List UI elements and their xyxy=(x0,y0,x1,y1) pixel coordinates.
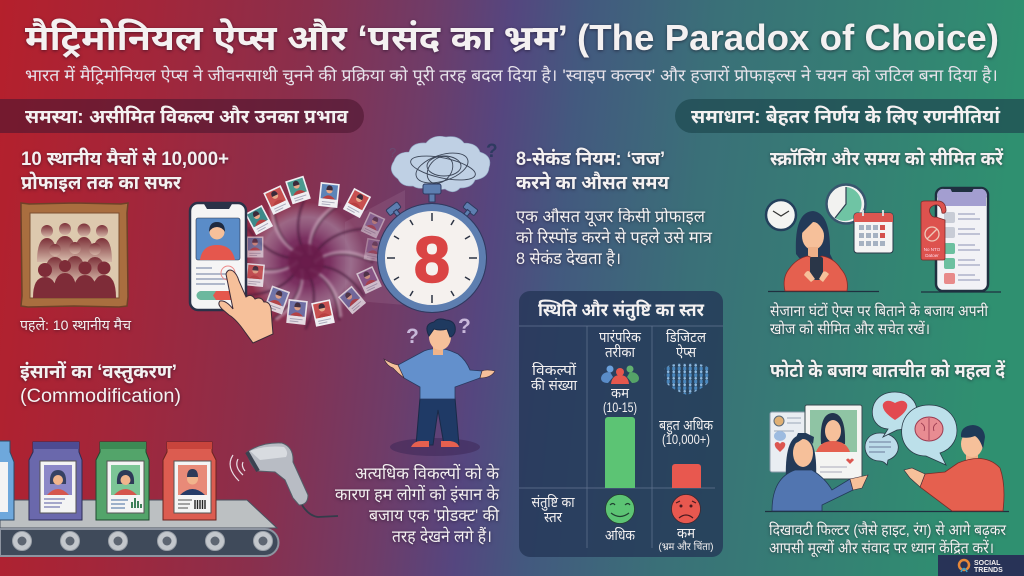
logo: social trends: TRENDS xyxy=(974,567,1003,574)
column: traditional: तरीका xyxy=(605,344,635,360)
text: too many options: कारण हम लोगों को इंसान के xyxy=(335,483,500,504)
title: मैट्रिमोनियल ऐप्स और ‘पसंद का भ्रम’ xyxy=(25,17,568,59)
text: too many options: तरह देखने लगे हैं। xyxy=(392,525,492,546)
logo: social trends xyxy=(938,555,1024,576)
icon: confused person shrugging: ? xyxy=(458,315,471,338)
illustration: woman with clocks and calendar xyxy=(766,184,1001,292)
label: low, confusion and anxiety: कम xyxy=(677,525,696,541)
label: more: अधिक xyxy=(605,527,635,543)
bag: purple xyxy=(29,442,82,520)
icon: chat bubble xyxy=(865,433,898,465)
icon: confused person shrugging: ? xyxy=(406,325,419,348)
row label: satisfaction: संतुष्टि का xyxy=(532,494,575,512)
icon: confused person shrugging xyxy=(384,315,495,456)
bag: blue xyxy=(0,441,14,520)
text: too many options: अत्यधिक विकल्पों को के xyxy=(355,462,500,483)
text: too many options: बजाय एक 'प्रोडक्ट' की xyxy=(369,505,500,525)
table title: स्थिति और संतुष्टि का स्तर xyxy=(538,300,705,321)
heading: commodification xyxy=(20,360,181,407)
icon: sad face xyxy=(672,494,700,524)
row label: satisfaction: स्तर xyxy=(544,509,562,525)
icon: large clock xyxy=(826,184,866,224)
column: traditional xyxy=(599,329,641,360)
heading: 10 matches to 10000 xyxy=(21,147,229,194)
logo: social trends: SOCIAL xyxy=(974,560,1001,567)
title xyxy=(25,17,999,59)
icon: confused thought cloud: ? xyxy=(486,141,498,162)
text: 8-second description xyxy=(516,208,713,268)
text: focus on shared values: आपसी मूल्यों और संवाद पर ध्यान केंद्रित करें। xyxy=(769,539,994,558)
icon: confused thought cloud xyxy=(389,136,498,192)
icon: barcode scanner xyxy=(230,443,338,517)
row label: number of options xyxy=(531,362,577,393)
swirl xyxy=(239,195,373,329)
icon: phone with profile xyxy=(190,203,246,310)
bag: red xyxy=(163,442,216,520)
heading: 10 matches to 10000: प्रोफाइल तक का सफर xyxy=(21,172,182,194)
column: traditional: पारंपरिक xyxy=(599,329,641,345)
bag: green xyxy=(96,442,149,520)
label: low, confusion and anxiety xyxy=(658,525,714,553)
text: 8-second description: 8 सेकंड देखता है। xyxy=(516,249,621,268)
text: limit your search xyxy=(770,302,989,338)
figure: woman on phone xyxy=(784,211,847,291)
icon: stopwatch showing 8 xyxy=(378,184,486,312)
label: few 10-15: (10-15) xyxy=(603,399,637,415)
figure: woman with open palm xyxy=(772,433,868,511)
icon: happy face xyxy=(606,494,634,524)
heading: 8-second rule: 8-सेकंड नियम: ‘जज’ xyxy=(516,147,665,170)
text: focus on shared values xyxy=(769,521,1007,558)
title: (The Paradox of Choice) xyxy=(577,17,999,58)
text: too many options xyxy=(335,462,500,546)
illustration: product conveyor belt xyxy=(0,441,338,556)
label: few 10-15 xyxy=(603,385,637,415)
icon: calendar xyxy=(854,210,893,253)
column: digital apps: डिजिटल xyxy=(666,329,706,345)
icon: large crowd xyxy=(664,364,710,395)
row label: satisfaction xyxy=(532,494,575,525)
icon: brain bubble xyxy=(902,405,957,465)
icon: do not disturb door hanger xyxy=(921,201,946,260)
heading: 8-second rule xyxy=(516,147,670,194)
heading: commodification: इंसानों का ‘वस्तुकरण’ xyxy=(20,360,177,384)
panel: problem banner xyxy=(0,99,364,133)
icon: stopwatch showing 8: 8 xyxy=(414,223,450,296)
figure: man with open palm xyxy=(904,425,1004,511)
panel: solution banner: समाधान: बेहतर निर्णय के लिए रणनीतियां xyxy=(691,105,1001,128)
icon: small clock xyxy=(766,200,796,230)
label: very many 10000+: बहुत अधिक xyxy=(659,417,713,435)
row label: number of options: की संख्या xyxy=(531,377,577,393)
illustration: vortex of profiles xyxy=(239,176,405,329)
panel: comparison table xyxy=(519,291,723,557)
text: focus on shared values: दिखावटी फिल्टर (जैसे हाइट, रंग) से आगे बढ़कर xyxy=(769,521,1007,539)
conveyor xyxy=(0,500,278,556)
bar: traditional green xyxy=(605,417,635,488)
row label: number of options: विकल्पों xyxy=(532,362,576,378)
icon: phone app list xyxy=(921,188,1001,292)
icon: small family group xyxy=(601,366,639,384)
text: 8-second description: एक औसत यूजर किसी प्रोफाइल xyxy=(516,208,706,227)
icon: do not disturb door hanger: Datoer xyxy=(925,253,939,258)
column: digital apps xyxy=(666,329,706,360)
icon: do not disturb door hanger: No NTO xyxy=(924,247,941,252)
caption: before 10 local matches: पहले: 10 स्थानीय मैच xyxy=(20,316,132,333)
label: very many 10000+: (10,000+) xyxy=(662,431,710,447)
heading: 10 matches to 10000: 10 स्थानीय मैचों से 10,000+ xyxy=(21,147,229,170)
icon: framed family portrait xyxy=(21,203,128,307)
profile cards ring xyxy=(245,176,385,327)
light beam to stopwatch xyxy=(345,190,405,305)
label: very many 10000+ xyxy=(659,417,713,447)
profile cards xyxy=(770,405,862,479)
panel: problem banner: समस्या: असीमित विकल्प और उनका प्रभाव xyxy=(25,106,349,128)
heading: limit scrolling and time: स्क्रॉलिंग और समय को सीमित करें xyxy=(770,147,1004,170)
text: 8-second description: को रिस्पोंड करने से पहले उसे मात्र xyxy=(516,228,713,247)
label: few 10-15: कम xyxy=(611,385,630,401)
panel: solution banner xyxy=(675,99,1024,133)
subtitle: भारत में मैट्रिमोनियल ऐप्स ने जीवनसाथी चुनने की प्रक्रिया को पूरी तरह बदल दिया है। 'स्वाइप कल्चर' और हजारों प्रोफाइल्स ने चयन को जटिल बना दिया है। xyxy=(25,64,998,87)
label: low, confusion and anxiety: (भ्रम और चिंता) xyxy=(658,540,714,553)
illustration: couple in conversation xyxy=(765,392,1009,512)
heading: value conversation over photos: फोटो के बजाय बातचीत को महत्व दें xyxy=(770,359,1006,382)
icon: pointing hand xyxy=(219,270,273,343)
heading: 8-second rule: करने का औसत समय xyxy=(516,171,670,194)
icon: heart bubble xyxy=(872,392,917,437)
heading: commodification: (Commodification) xyxy=(20,386,181,407)
bar: digital red xyxy=(672,464,701,488)
column: digital apps: ऐप्स xyxy=(676,343,696,360)
text: limit your search: खोज को सीमित और सचेत रखें। xyxy=(770,320,930,338)
icon: confused thought cloud: ? xyxy=(389,145,396,160)
text: limit your search: सेजाना घंटों ऐप्स पर बिताने के बजाय अपनी xyxy=(770,302,989,320)
